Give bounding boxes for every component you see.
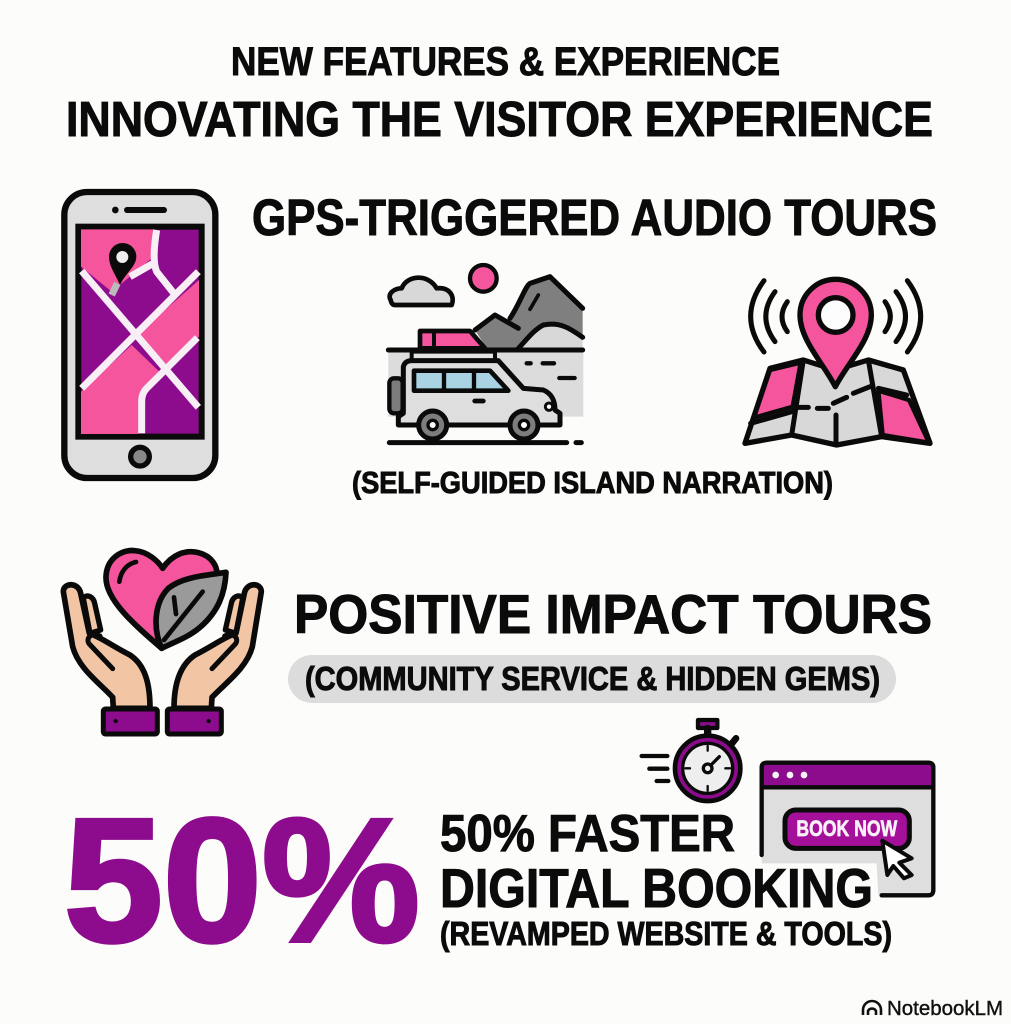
button: book now [785,810,909,848]
icon: stopwatch [642,720,740,801]
icon: off-road car in landscape [388,265,583,443]
heading: section title [66,40,933,147]
callout: community service pill [288,655,896,703]
icon: smartphone with map [64,192,215,478]
heading: section title: NEW FEATURES & EXPERIENCE [231,40,780,84]
icon: booking browser window [762,763,933,895]
big stat: 50%: 50% [64,783,420,979]
text: revamped website and tools: (REVAMPED WEBSITE & TOOLS) [440,915,892,952]
logo: NotebookLM: NotebookLM [887,998,1003,1020]
heading: 50% faster digital booking: 50% FASTER [440,805,735,863]
heading: 50% faster digital booking: DIGITAL BOOKING [440,857,873,919]
icon: cursor [882,841,912,878]
heading: positive impact tours: POSITIVE IMPACT TOURS [294,583,932,645]
callout: community service pill: (COMMUNITY SERVICE & HIDDEN GEMS) [305,660,880,697]
icon: hands holding heart and leaf [63,551,261,734]
heading: section title: INNOVATING THE VISITOR EXPERIENCE [66,93,933,147]
heading: 50% faster digital booking [440,805,873,919]
icon: map with location pin and signal waves [745,279,930,445]
heading: self-guided island narration: (SELF-GUIDED ISLAND NARRATION) [352,465,833,500]
button: book now: BOOK NOW [796,816,898,841]
